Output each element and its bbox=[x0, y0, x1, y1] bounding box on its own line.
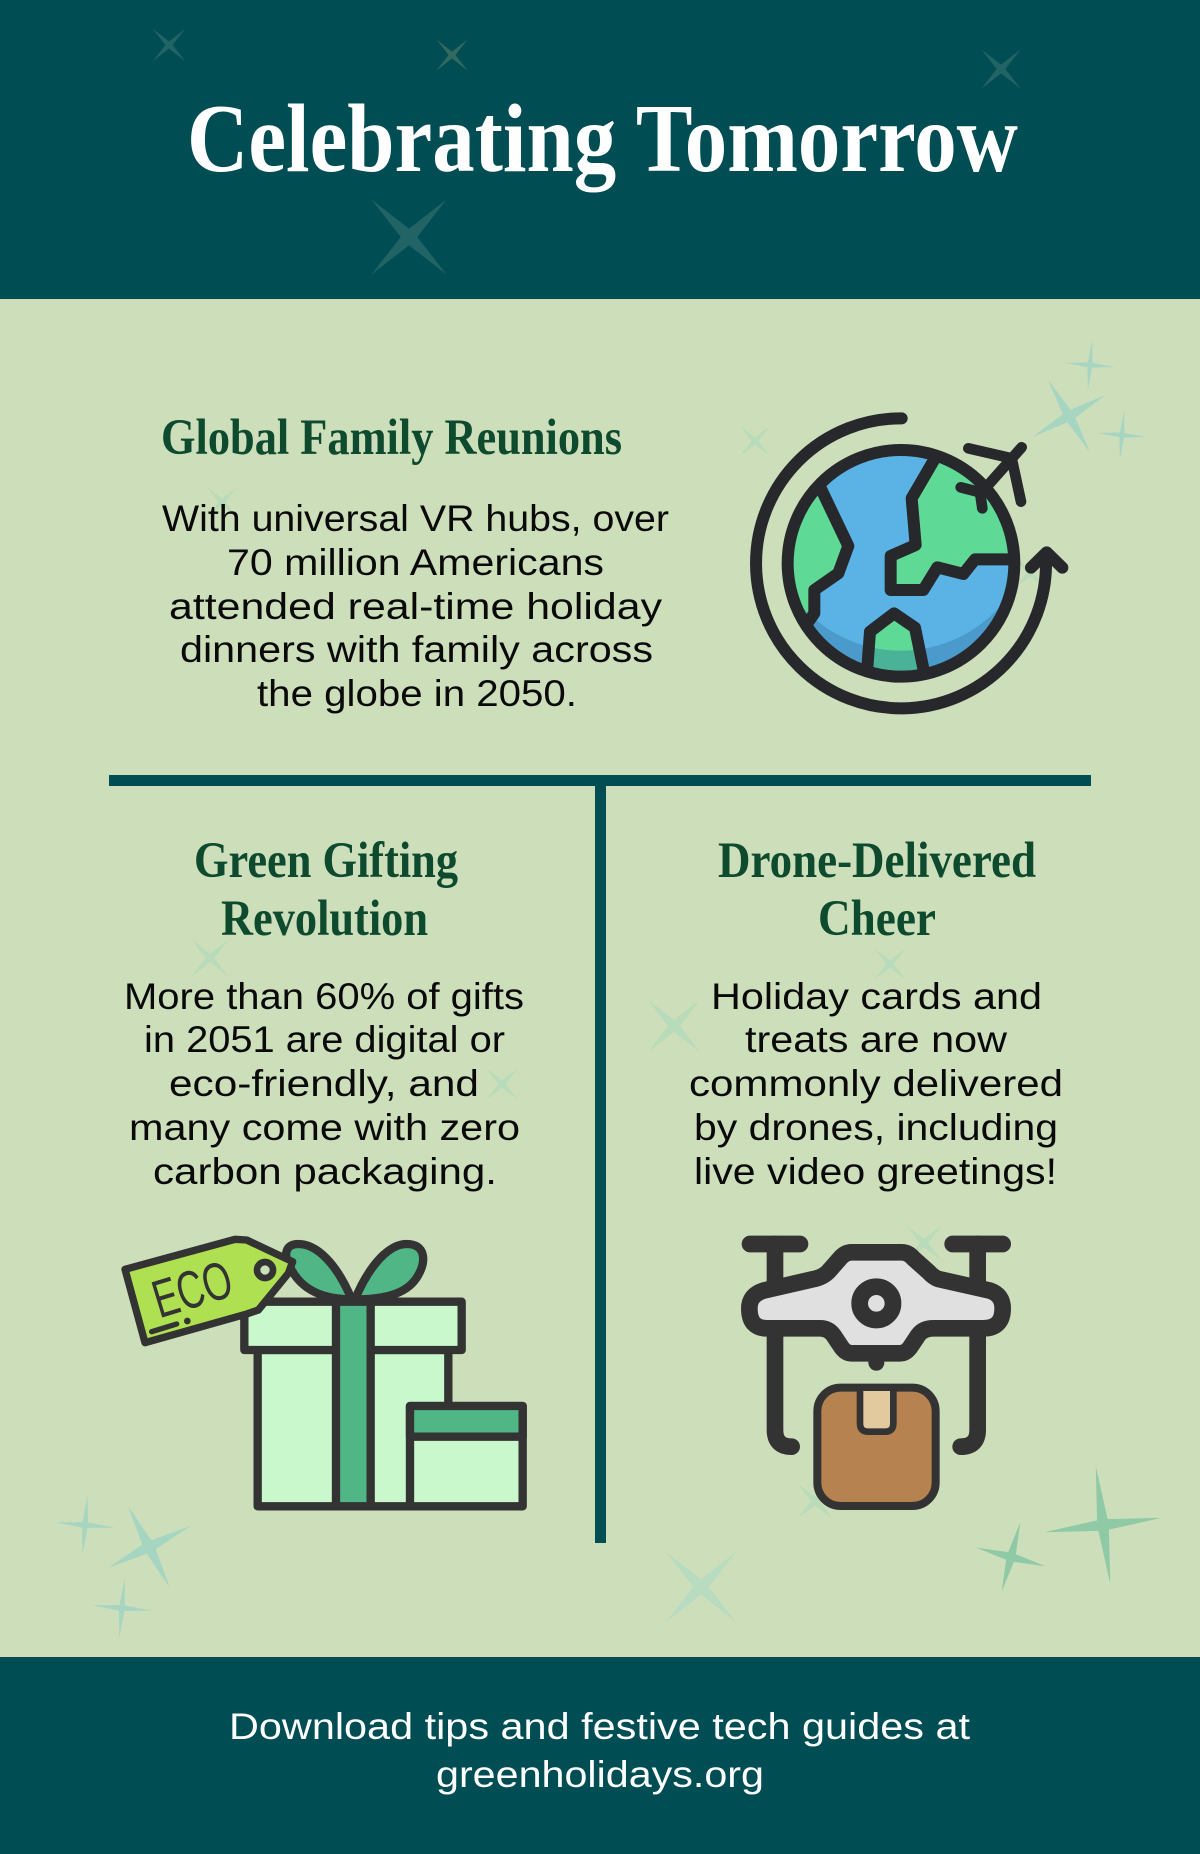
icon: globe with airplane bbox=[753, 418, 1062, 708]
heading: green gifting revolution bbox=[194, 833, 458, 947]
text block: drone-delivered cheer: treats are now bbox=[745, 1019, 1007, 1060]
icon: delivery drone with parcel bbox=[749, 1244, 1003, 1506]
text block: global family reunions: With universal VR hubs, over bbox=[162, 498, 669, 539]
panel: green gifting revolution bbox=[124, 833, 524, 1506]
heading: drone-delivered cheer: Drone-Delivered bbox=[718, 833, 1036, 889]
footer text bbox=[229, 1706, 971, 1795]
text block: green gifting: many come with zero bbox=[129, 1107, 520, 1148]
header sparkles bbox=[136, 12, 1041, 312]
heading: green gifting revolution: Green Gifting bbox=[194, 833, 458, 889]
text block: global family reunions: dinners with family across bbox=[180, 629, 653, 670]
title: Celebrating Tomorrow bbox=[187, 85, 1018, 193]
heading: global family reunions: Global Family Reunions bbox=[161, 410, 622, 466]
body sparkles bbox=[52, 338, 1169, 1658]
horizontal divider bbox=[109, 775, 1091, 786]
eco tag bbox=[125, 1239, 293, 1343]
text block: global family reunions bbox=[162, 498, 669, 714]
vertical divider bbox=[595, 775, 606, 1543]
text block: global family reunions: attended real-time holiday bbox=[169, 586, 663, 627]
footer text: greenholidays.org bbox=[436, 1754, 764, 1795]
text block: green gifting: in 2051 are digital or bbox=[144, 1019, 505, 1060]
text block: green gifting: More than 60% of gifts bbox=[124, 976, 524, 1017]
text block: drone-delivered cheer bbox=[689, 976, 1063, 1192]
panel: drone-delivered cheer bbox=[689, 833, 1063, 1506]
heading: drone-delivered cheer bbox=[718, 833, 1036, 947]
text block: global family reunions: the globe in 2050. bbox=[257, 673, 577, 714]
text block: drone-delivered cheer: Holiday cards and bbox=[711, 976, 1042, 1017]
text block: drone-delivered cheer: by drones, including bbox=[694, 1107, 1058, 1148]
eco tag: ECO bbox=[146, 1250, 239, 1330]
footer text: Download tips and festive tech guides at bbox=[229, 1706, 971, 1747]
heading: drone-delivered cheer: Cheer bbox=[818, 891, 936, 947]
text block: green gifting: eco-friendly, and bbox=[169, 1063, 479, 1104]
footer band bbox=[0, 1657, 1200, 1854]
text block: green gifting: carbon packaging. bbox=[153, 1151, 497, 1192]
heading: green gifting revolution: Revolution bbox=[221, 891, 428, 947]
header band bbox=[0, 0, 1200, 312]
icon: gift boxes with eco tag bbox=[125, 1239, 523, 1506]
text block: drone-delivered cheer: commonly delivered bbox=[689, 1063, 1063, 1104]
panel: global family reunions bbox=[161, 410, 1062, 714]
text block: global family reunions: 70 million Americans bbox=[227, 542, 604, 583]
text block: green gifting bbox=[124, 976, 524, 1192]
text block: drone-delivered cheer: live video greetings! bbox=[694, 1151, 1057, 1192]
